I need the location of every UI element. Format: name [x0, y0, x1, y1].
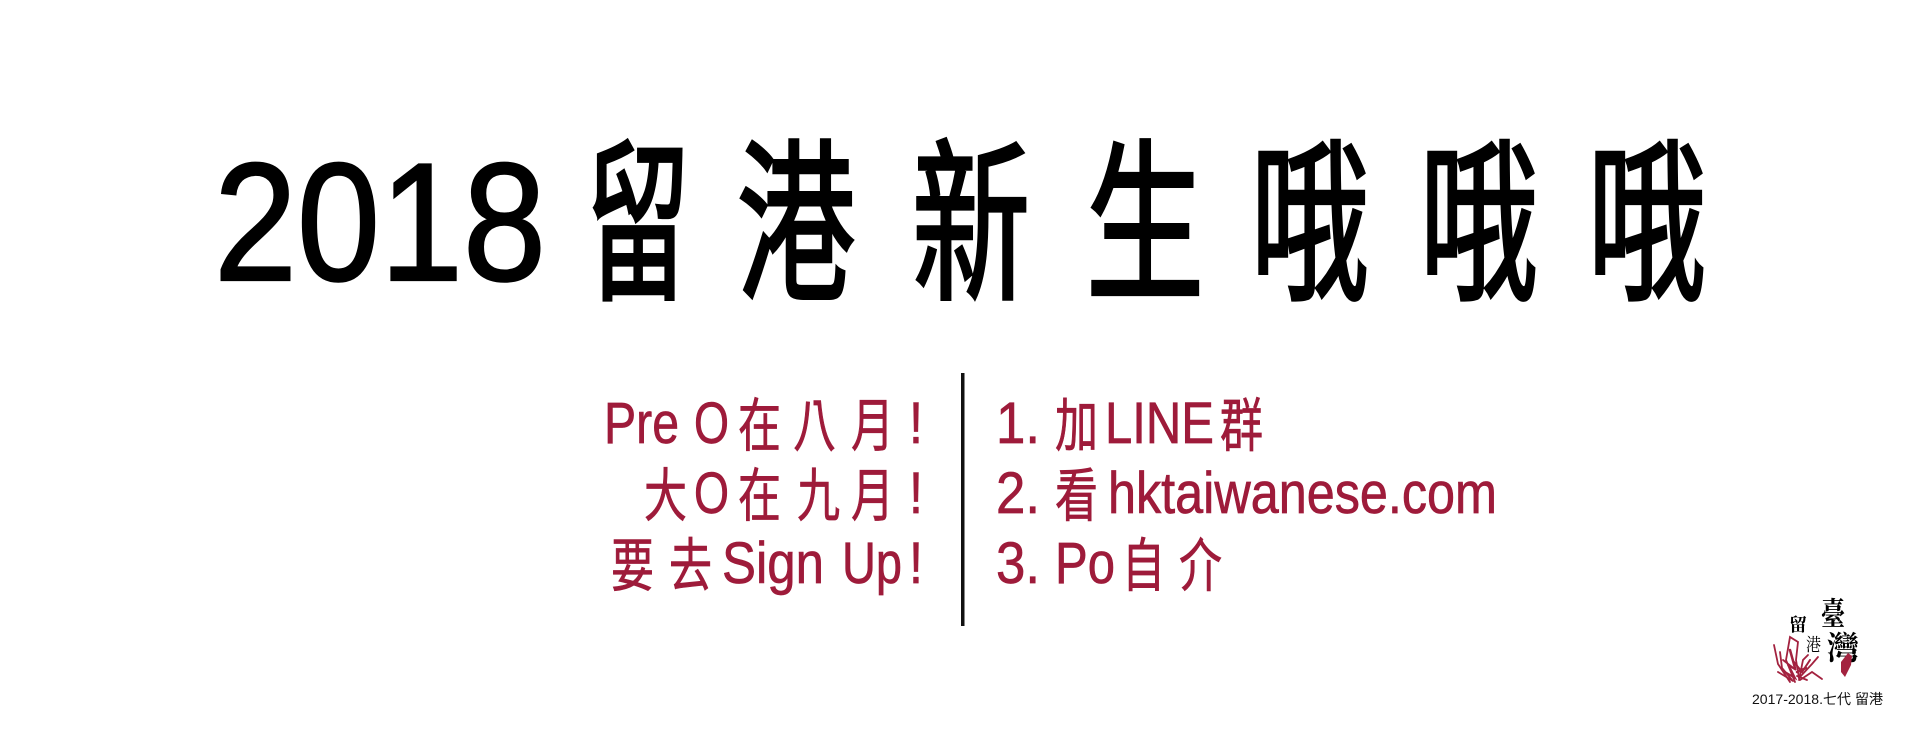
calligraphy: 臺灣 and 留港: 臺	[1821, 589, 1845, 635]
line: sign up: Sign	[722, 531, 824, 596]
line: main O in September: 大	[644, 464, 687, 529]
step 1: 1.	[996, 391, 1040, 456]
step 3: 自	[1122, 534, 1165, 599]
step 1: 加	[1055, 394, 1098, 459]
line: main O in September: 九	[797, 464, 840, 529]
title: 生	[1086, 128, 1204, 323]
line: main O in September: 在	[738, 464, 781, 529]
divider	[961, 373, 964, 626]
title	[214, 128, 1706, 323]
title: 哦	[1420, 128, 1538, 323]
logo: Taiwanese in Hong Kong society	[1752, 589, 1883, 707]
step 2: 看	[1055, 464, 1098, 529]
line: Pre O in August: !	[909, 391, 923, 456]
line: main O in September: !	[909, 461, 923, 526]
step 1	[996, 391, 1263, 459]
line: main O in September: 月	[851, 464, 894, 529]
line: Pre O in August: 在	[738, 394, 781, 459]
step 3	[996, 531, 1222, 599]
line: sign up: Up	[842, 531, 902, 596]
line: sign up: !	[909, 531, 923, 596]
calligraphy: 臺灣 and 留港: 灣	[1827, 623, 1860, 669]
step 3: 3.	[996, 531, 1040, 596]
line: Pre O in August	[604, 391, 923, 459]
calligraphy: 臺灣 and 留港: 港	[1806, 631, 1821, 657]
icon: red flower	[1774, 637, 1822, 682]
title: 新	[912, 128, 1030, 323]
line: Pre O in August: 月	[851, 394, 894, 459]
line: Pre O in August: Pre	[604, 391, 679, 456]
step 2: 2.	[996, 461, 1040, 526]
step 1: LINE	[1105, 391, 1214, 456]
step 2: hktaiwanese.com	[1108, 461, 1497, 526]
line: sign up: 去	[669, 534, 712, 599]
line: main O in September: O	[694, 461, 729, 526]
calligraphy: 臺灣 and 留港	[1789, 589, 1860, 669]
title: 2018	[214, 128, 546, 316]
line: sign up	[611, 531, 923, 599]
line: Pre O in August: 八	[793, 394, 836, 459]
line: main O in September	[644, 461, 923, 529]
text block: three steps	[996, 391, 1497, 599]
line: Pre O in August: O	[694, 391, 729, 456]
icon: red Taiwan seal	[1841, 653, 1852, 677]
step 3: 介	[1179, 534, 1222, 599]
calligraphy: 臺灣 and 留港: 留	[1789, 611, 1807, 637]
title: 留	[586, 128, 690, 323]
step 1: 群	[1220, 394, 1263, 459]
line: sign up: 要	[611, 534, 654, 599]
step 2	[996, 461, 1497, 529]
step 3: Po	[1055, 531, 1115, 596]
title: 哦	[1251, 128, 1369, 323]
title: 哦	[1588, 128, 1706, 323]
title: 港	[737, 128, 855, 323]
text block: orientation dates	[604, 391, 923, 599]
footer caption: 2017-2018.七代 留港	[1752, 691, 1883, 707]
